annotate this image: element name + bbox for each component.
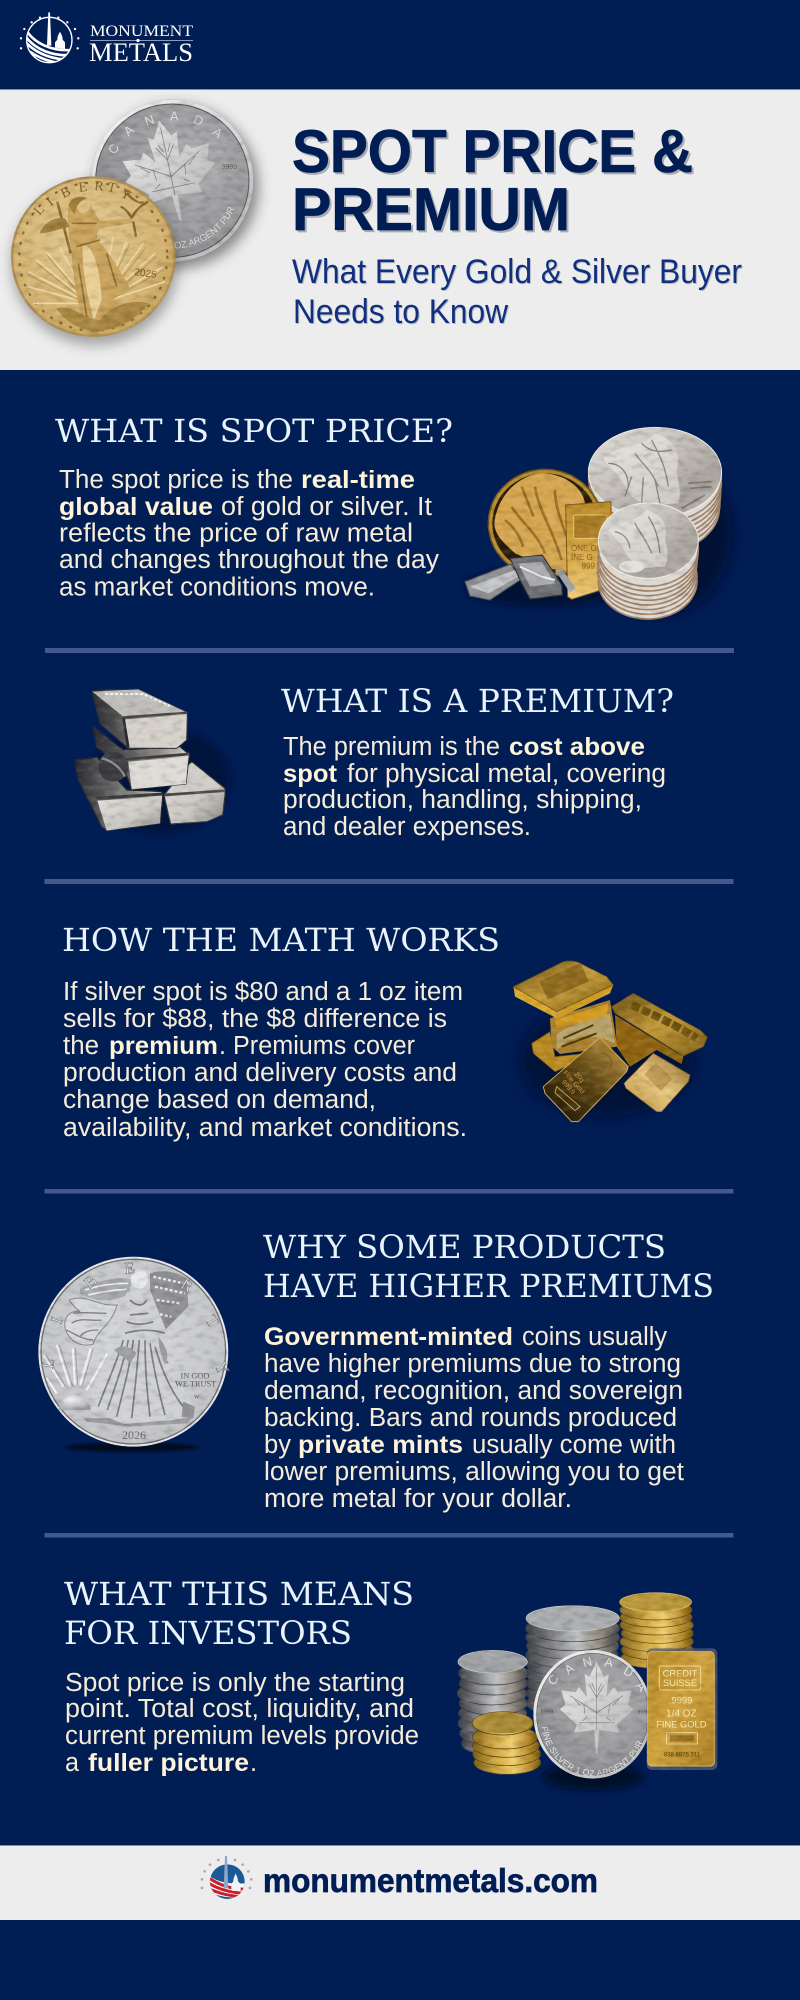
top bar bbox=[92, 689, 187, 748]
body text: lower premiums, allowing you to get bbox=[264, 1458, 684, 1486]
panel: why some products have higher premiums bbox=[38, 1228, 714, 1513]
divider bbox=[44, 1533, 734, 1538]
logo wordmark: MONUMENT bbox=[90, 23, 193, 40]
header logo bbox=[20, 12, 193, 67]
body text: availability, and market conditions. bbox=[63, 1114, 467, 1142]
body text: production, handling, shipping, bbox=[283, 786, 642, 814]
icon: monument metals colored emblem bbox=[201, 1856, 253, 1899]
subtitle: Needs to Know bbox=[293, 293, 508, 331]
image: silver bars stack bbox=[75, 689, 230, 833]
body text: a bbox=[65, 1749, 80, 1777]
icon: american silver eagle coin: 2026 bbox=[122, 1428, 146, 1442]
divider bbox=[44, 1189, 734, 1194]
silver maple leaf coin: 9999 bbox=[637, 1709, 650, 1715]
middle upright bar bbox=[550, 1000, 617, 1054]
title bbox=[292, 118, 693, 243]
website address: monumentmetals.com bbox=[263, 1862, 598, 1899]
image: coins and bars group bbox=[465, 427, 732, 619]
image: coin stacks and gold bar bbox=[457, 1592, 718, 1794]
divider bbox=[45, 648, 734, 653]
ground bbox=[83, 1417, 193, 1427]
credit suisse gold bar bbox=[647, 1648, 717, 1770]
body text: have higher premiums due to strong bbox=[264, 1350, 681, 1378]
body text: private mints bbox=[298, 1431, 463, 1459]
body text: change based on demand, bbox=[63, 1086, 376, 1114]
panel: what this means for investors bbox=[64, 1575, 718, 1794]
body text: coins usually bbox=[522, 1323, 667, 1351]
panel: hero band bbox=[0, 89, 800, 370]
icon: silver maple leaf coin: 1 OZ ARGENT PUR bbox=[174, 206, 234, 248]
heading bbox=[64, 1575, 414, 1652]
panel: what is a premium bbox=[75, 682, 674, 841]
heading bbox=[263, 1228, 714, 1305]
body text: and changes throughout the day bbox=[59, 546, 439, 574]
body text: premium bbox=[109, 1032, 218, 1060]
heading: WHAT IS A PREMIUM? bbox=[281, 682, 674, 720]
body text bbox=[264, 1323, 684, 1513]
left silver stack bbox=[457, 1662, 528, 1755]
icon: american silver eagle coin: WE TRUST bbox=[175, 1380, 216, 1389]
large silver stack bbox=[589, 433, 721, 553]
body text: as market conditions move. bbox=[59, 574, 375, 602]
small silver stack bbox=[598, 511, 698, 619]
body text: If silver spot is $80 and a 1 oz item bbox=[63, 978, 463, 1006]
silver minibars bbox=[465, 564, 520, 600]
credit suisse gold bar: 838 8875 311 bbox=[664, 1753, 701, 1759]
title: SPOT PRICE & bbox=[292, 118, 693, 185]
figure body bbox=[91, 1290, 194, 1424]
branches bbox=[150, 1271, 188, 1333]
icon: silver maple leaf coin bbox=[87, 96, 267, 276]
icon: monument metals emblem bbox=[20, 12, 79, 64]
gold bar bbox=[566, 502, 612, 599]
credit suisse gold bar: SUISSE bbox=[663, 1678, 697, 1688]
heading: WHAT IS SPOT PRICE? bbox=[55, 412, 453, 450]
right gold stack bbox=[620, 1600, 693, 1668]
icon: gold liberty coin bbox=[11, 176, 178, 345]
body text: The spot price is the bbox=[59, 466, 293, 494]
divider bbox=[44, 879, 734, 884]
hero coins bbox=[4, 96, 267, 352]
icon: american silver eagle coin bbox=[38, 1257, 233, 1452]
credit suisse gold bar: FINE GOLD bbox=[656, 1719, 707, 1729]
credit suisse gold bar: 1/4 OZ bbox=[666, 1709, 697, 1720]
body text: . Premiums cover bbox=[219, 1032, 415, 1060]
credit suisse gold bar: CREDIT bbox=[663, 1669, 698, 1679]
logo wordmark bbox=[89, 23, 193, 67]
icon: silver maple leaf coin: CANADA bbox=[105, 110, 226, 156]
sun rays bbox=[43, 1345, 107, 1393]
body text bbox=[59, 466, 439, 602]
body text: production and delivery costs and bbox=[63, 1059, 457, 1087]
subtitle bbox=[292, 253, 742, 331]
body text: the bbox=[63, 1032, 99, 1060]
body text: fuller picture bbox=[88, 1749, 249, 1777]
heading: WHY SOME PRODUCTS bbox=[263, 1228, 666, 1266]
body text: for physical metal, covering bbox=[347, 760, 666, 788]
image: coins and bars group: 999. bbox=[582, 562, 597, 571]
body text bbox=[283, 733, 666, 841]
body text: backing. Bars and rounds produced bbox=[264, 1404, 677, 1432]
title: PREMIUM bbox=[292, 176, 570, 243]
icon: american silver eagle coin: W bbox=[194, 1394, 200, 1400]
flowing flag bbox=[65, 1298, 117, 1345]
body text: sells for $88, the $8 difference is bbox=[63, 1005, 447, 1033]
lower back bar bbox=[532, 1032, 587, 1072]
middle silver stack bbox=[526, 1615, 619, 1717]
body text: Government-minted bbox=[264, 1323, 513, 1351]
image: gold bars group bbox=[513, 961, 707, 1122]
body text: spot bbox=[283, 760, 338, 788]
silver maple leaf coin: CANADA bbox=[545, 1654, 649, 1695]
body text: global value bbox=[59, 493, 213, 521]
body text: The premium is the bbox=[283, 733, 500, 761]
icon: gold liberty coin: LIBERTY bbox=[31, 179, 133, 219]
image: coins and bars group: INE G bbox=[571, 553, 593, 562]
panel: how the math works bbox=[62, 921, 707, 1142]
small pale bar bbox=[624, 1053, 690, 1112]
body text: usually come with bbox=[472, 1431, 676, 1459]
coin inscriptions: LIBERTY bbox=[38, 1258, 233, 1378]
right bar bbox=[615, 1015, 683, 1067]
image: gold bars group: 20g bbox=[573, 1071, 585, 1084]
heading: HOW THE MATH WORKS bbox=[62, 921, 500, 959]
heading: HAVE HIGHER PREMIUMS bbox=[263, 1267, 714, 1305]
body text: more metal for your dollar. bbox=[264, 1485, 572, 1513]
body text: by bbox=[264, 1431, 291, 1459]
heading: WHAT THIS MEANS bbox=[64, 1575, 414, 1613]
hair bbox=[80, 1278, 132, 1300]
icon: silver maple leaf coin: 9999 bbox=[222, 164, 237, 171]
middle bar bbox=[93, 727, 189, 789]
body text: cost above bbox=[509, 733, 645, 761]
body text: reflects the price of raw metal bbox=[59, 520, 413, 548]
image: coins and bars group: ONE OU bbox=[571, 544, 603, 553]
front dark bar bbox=[543, 1037, 628, 1122]
heading: FOR INVESTORS bbox=[64, 1614, 352, 1652]
icon: gold liberty coin: 2025 bbox=[134, 267, 158, 281]
silver maple leaf coin bbox=[533, 1650, 650, 1779]
icon: american silver eagle coin: IN GOD bbox=[181, 1371, 209, 1380]
body text: Spot price is only the starting bbox=[65, 1669, 405, 1697]
logo wordmark: METALS bbox=[89, 38, 193, 67]
gold buffalo coin bbox=[488, 469, 602, 577]
credit suisse gold bar: .9999 bbox=[669, 1695, 692, 1705]
panel: what is spot price bbox=[55, 412, 732, 619]
bottom left bar bbox=[75, 757, 163, 831]
body text: . bbox=[250, 1749, 257, 1777]
image: gold bars group: Fine Gold bbox=[561, 1069, 586, 1096]
body text bbox=[65, 1669, 419, 1777]
body text: point. Total cost, liquidity, and bbox=[65, 1695, 414, 1723]
subtitle: What Every Gold & Silver Buyer bbox=[292, 253, 742, 291]
bottom right bar bbox=[164, 762, 225, 824]
body text: real-time bbox=[301, 466, 415, 494]
silver maple leaf coin: 9999 bbox=[541, 1709, 553, 1715]
silver maple leaf coin: FINE SILVER 1 OZ ARGENT PUR bbox=[542, 1726, 642, 1776]
body text: demand, recognition, and sovereign bbox=[264, 1377, 683, 1405]
front gold stack bbox=[472, 1726, 541, 1774]
top bar bbox=[513, 987, 557, 1018]
image: gold bars group: 999.9 bbox=[560, 1079, 576, 1096]
body text bbox=[63, 978, 467, 1142]
body text: current premium levels provide bbox=[65, 1722, 419, 1750]
body text: of gold or silver. It bbox=[221, 493, 432, 521]
panel: footer band bbox=[0, 1845, 800, 1920]
body text: and dealer expenses. bbox=[283, 813, 531, 841]
